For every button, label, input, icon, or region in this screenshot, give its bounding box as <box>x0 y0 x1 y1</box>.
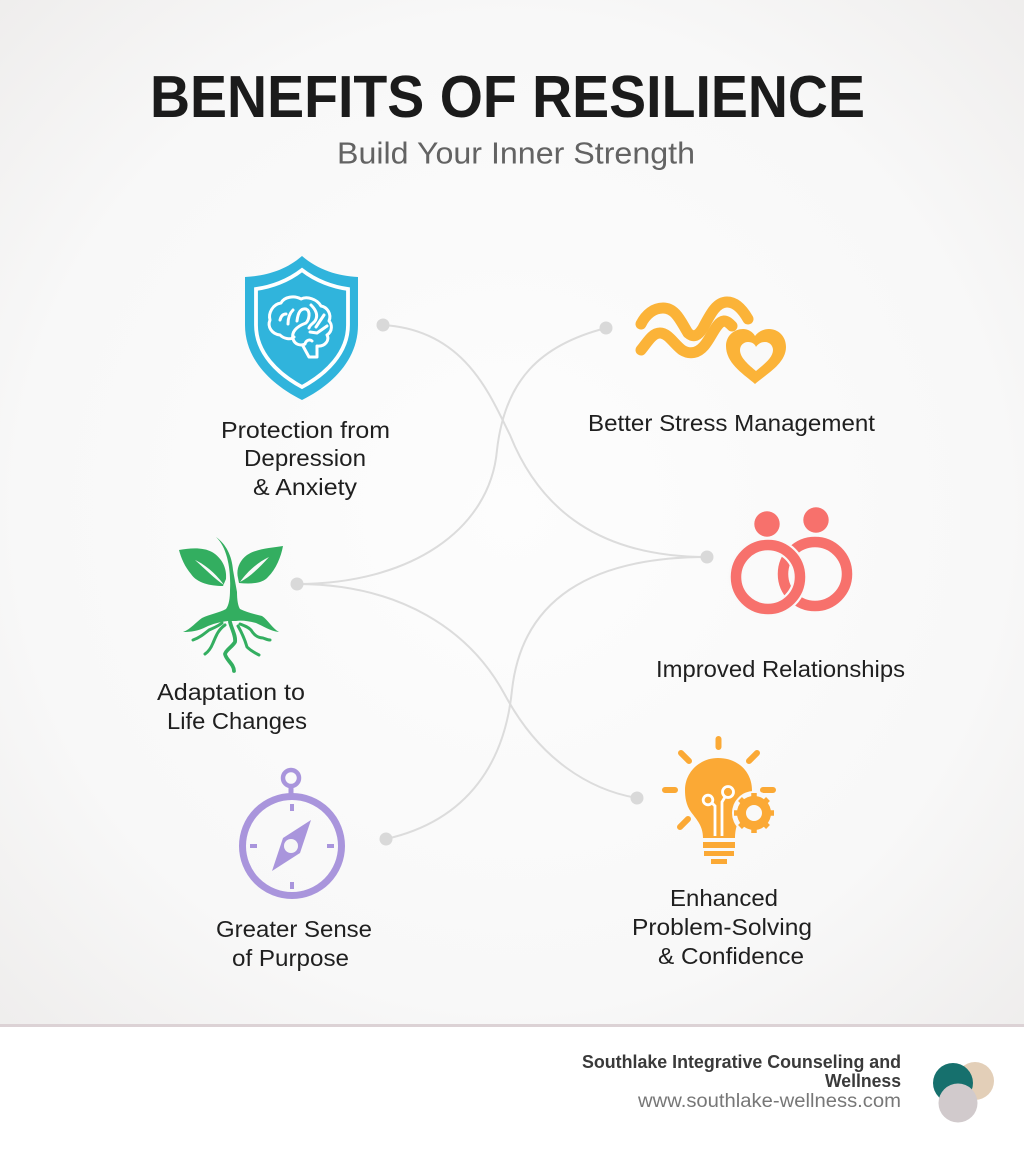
label: relationships: Improved Relationships <box>656 656 905 682</box>
label: protection: Depression <box>244 445 366 471</box>
leaf veins <box>195 557 269 585</box>
icon: lightbulb with gear <box>665 739 776 864</box>
label: protection <box>221 417 390 500</box>
icon: stress waves with heart <box>641 302 786 384</box>
footer: organisation text: www.southlake-wellness.com <box>637 1091 901 1112</box>
footer: organisation text: Southlake Integrative Counseling and <box>582 1052 901 1072</box>
footer: organisation text: Wellness <box>825 1071 901 1091</box>
label: purpose: Greater Sense <box>216 916 372 942</box>
footer: logo <box>933 1062 994 1122</box>
connector lines <box>297 325 707 839</box>
label: stress: Better Stress Management <box>588 410 876 436</box>
label: adaptation: Adaptation to <box>157 679 305 705</box>
icon: compass <box>242 770 342 896</box>
label: problem solving <box>632 885 812 969</box>
title: BENEFITS OF RESILIENCE <box>150 64 865 130</box>
connector dots <box>290 318 714 846</box>
label: problem solving: Enhanced <box>670 885 778 911</box>
icon: sprout with roots <box>179 537 283 671</box>
icon: two linked people <box>736 507 847 609</box>
label: problem solving: & Confidence <box>658 943 804 969</box>
label: problem solving: Problem-Solving <box>632 914 812 940</box>
label: adaptation: Life Changes <box>167 708 307 734</box>
label: purpose: of Purpose <box>232 945 349 971</box>
leaf left <box>179 548 226 586</box>
icon: gear <box>732 791 776 835</box>
label: protection: & Anxiety <box>253 474 358 500</box>
icon: brain <box>269 297 331 357</box>
icon: shield with brain <box>245 256 358 400</box>
label: protection: Protection from <box>221 417 390 443</box>
leaf right <box>237 546 283 583</box>
label: purpose <box>216 916 372 971</box>
footer: organisation text <box>582 1052 901 1112</box>
subtitle: Build Your Inner Strength <box>337 136 695 170</box>
stem and main roots <box>183 537 279 632</box>
label: adaptation <box>157 679 307 734</box>
